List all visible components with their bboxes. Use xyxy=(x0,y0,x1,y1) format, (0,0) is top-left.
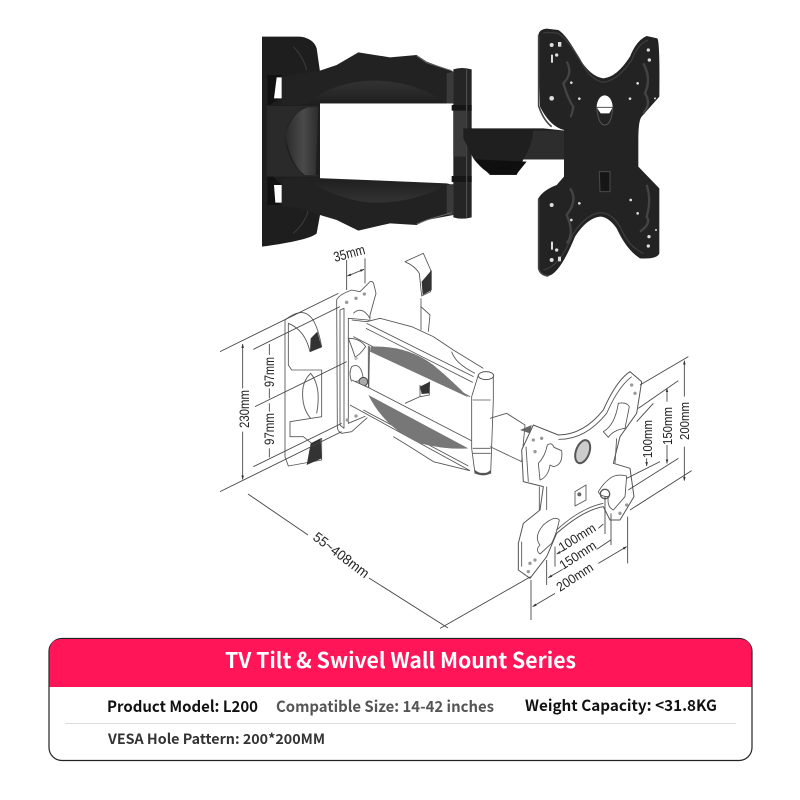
spec: compatible size: Compatible Size: 14-42 inches xyxy=(276,695,494,717)
spec: weight capacity: Weight Capacity: <31.8KG xyxy=(525,694,717,716)
lower swing arm xyxy=(267,177,453,231)
long depth dimension line xyxy=(248,494,448,628)
dimension labels: 200mm xyxy=(553,560,596,595)
wall plate xyxy=(262,37,320,247)
panel background xyxy=(49,638,752,760)
product photo: black wall mount xyxy=(262,29,659,276)
panel header band xyxy=(50,639,752,687)
spec: VESA hole pattern: VESA Hole Pattern: 200*200MM xyxy=(107,729,325,749)
upper arm drawing xyxy=(352,318,483,400)
ghost wall cover xyxy=(285,313,322,466)
pivot drawing xyxy=(472,372,494,475)
dimension lines xyxy=(220,258,365,492)
spec: product model: Product Model: L200 xyxy=(107,695,258,717)
pivot column xyxy=(452,68,472,219)
dimension labels: 230mm xyxy=(236,390,252,428)
line drawing: arm assembly with dimensions xyxy=(220,253,494,492)
upper swing arm xyxy=(267,52,453,105)
dimension labels: 200mm xyxy=(677,402,692,440)
dimension labels: 100mm xyxy=(556,520,598,555)
line drawing: VESA plate with dimensions xyxy=(440,357,692,628)
heading: TV Tilt & Swivel Wall Mount Series xyxy=(225,644,576,675)
wall bracket xyxy=(337,281,376,433)
lower arm drawing xyxy=(350,380,477,471)
extension arm drawing xyxy=(490,413,532,462)
ghost rear cover xyxy=(405,253,432,403)
panel: product specifications xyxy=(49,638,752,760)
dimension labels: 150mm xyxy=(556,538,599,573)
dimension labels: 100mm xyxy=(640,420,655,458)
dimension labels: 35mm xyxy=(332,241,367,265)
dimension labels: 97mm xyxy=(261,357,277,387)
dimension labels xyxy=(236,241,692,595)
VESA mounting plate xyxy=(538,29,659,276)
extension arm xyxy=(463,128,565,175)
dimension labels: 55~408mm xyxy=(310,529,373,581)
dimension labels: 97mm xyxy=(261,413,277,445)
dimension labels: 150mm xyxy=(660,407,675,445)
VESA plate drawing xyxy=(518,372,642,578)
dimension lines xyxy=(440,357,692,628)
divider xyxy=(65,722,736,724)
